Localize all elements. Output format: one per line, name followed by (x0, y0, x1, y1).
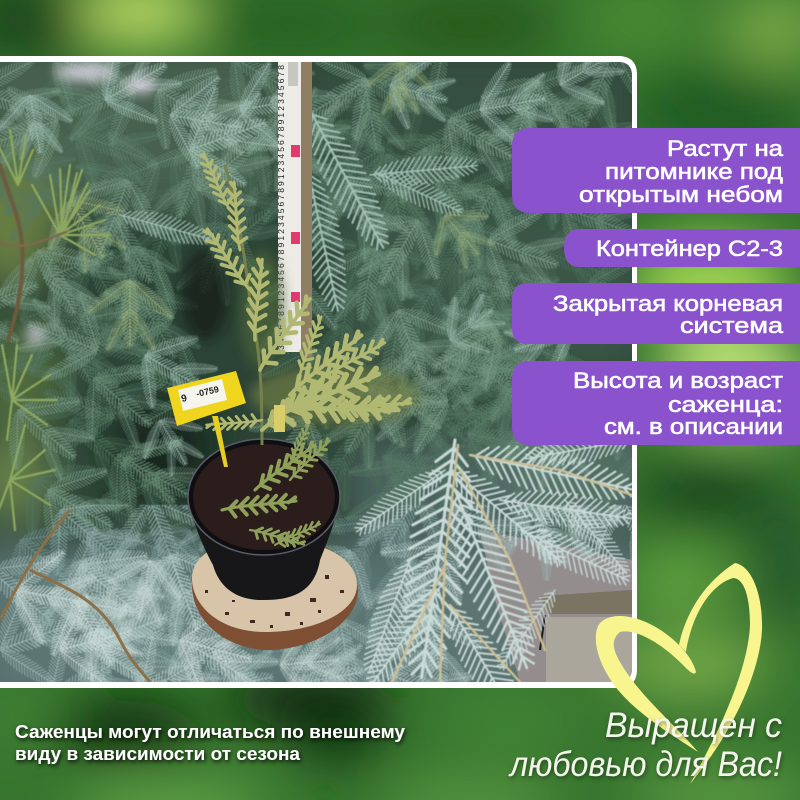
spruce highlights upper (0, 62, 625, 477)
dark gap behind seedling (181, 250, 229, 340)
wooden crate (480, 530, 632, 682)
icon: yellow hand-drawn heart (596, 563, 762, 784)
badge: grown outdoors: Растут на (667, 136, 784, 161)
photo frame: white rounded panel (0, 56, 637, 688)
badge: height and age (512, 361, 800, 445)
badge: container (564, 229, 800, 267)
badge: closed root system: система (680, 313, 784, 338)
badge: grown outdoors (512, 128, 800, 213)
plant tag: -0759 (195, 384, 220, 399)
badge: grown outdoors: питомнике под (605, 159, 783, 184)
photo tonal areas (0, 62, 632, 682)
brown twigs (0, 510, 150, 682)
plant tag: 9 (180, 393, 189, 405)
disclaimer note (15, 722, 405, 764)
disclaimer note: виду в зависимости от сезона (15, 744, 301, 764)
slogan: любовью для Вас! (508, 745, 782, 784)
tan main stems (392, 445, 632, 682)
slogan (508, 706, 782, 784)
plant tag (167, 371, 246, 467)
disclaimer note: Саженцы могут отличаться по внешнему (15, 722, 405, 742)
ruler and stake: 345678912345678912345678912345678912345678 (276, 65, 286, 350)
badge: height and age: см. в описании (604, 414, 783, 439)
badge: height and age: саженца: (668, 392, 783, 417)
badge: closed root system (512, 283, 800, 344)
wood disc (192, 538, 358, 650)
slogan: Выращен с (605, 706, 782, 745)
badge: grown outdoors: открытым небом (579, 182, 783, 207)
spruce field upper (0, 62, 632, 535)
pine tufts at left edge (0, 130, 110, 530)
spruce branches lower (0, 438, 632, 682)
badge: closed root system: Закрытая корневая (553, 291, 783, 316)
badge: height and age: Высота и возраст (573, 368, 783, 393)
sky gaps at top (25, 62, 156, 343)
juniper seedling (200, 150, 420, 560)
pot (188, 439, 340, 600)
ruler and stake (276, 62, 312, 357)
badge: container: Контейнер С2-3 (596, 236, 783, 261)
juniper sprigs in soil (220, 424, 331, 548)
